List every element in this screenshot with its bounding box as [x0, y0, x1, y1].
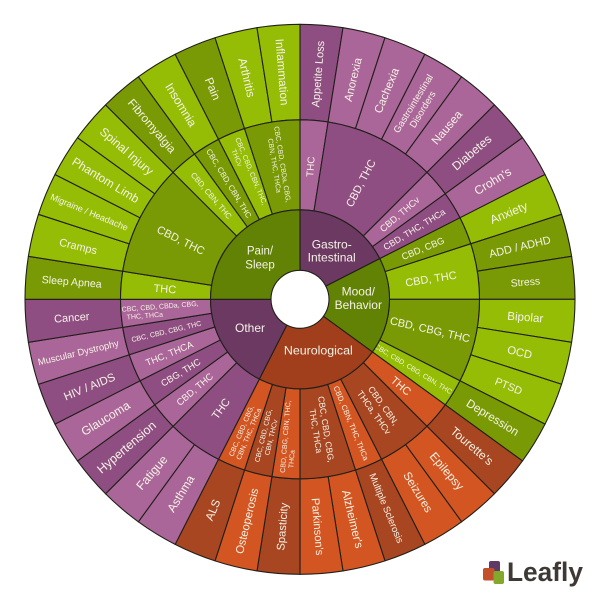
cell: CBD, CBN, THC	[173, 153, 257, 237]
cell: Gastrointestinal Disorders: Disorders	[408, 89, 439, 130]
cell: HIV / AIDS: HIV / AIDS	[62, 371, 118, 403]
cell: CBD, CBN, THC: CBD, CBN, THC	[189, 171, 234, 221]
category: Pain/Sleep	[210, 210, 300, 299]
cell: CBC, CBD, CBN, THC: CBC, CBD, CBN, THC	[204, 147, 253, 220]
cell: CBC, CBD, CBG, CBN, THCv	[244, 382, 286, 477]
cell: Insomnia	[138, 52, 231, 156]
cell: CBC, CBD, CBG, CBN, THCv: CBN, THCv	[264, 419, 280, 456]
cell: Epilepsy	[395, 425, 494, 524]
cell: CBC, CBD, CBN, THC, THCv	[219, 127, 285, 221]
cell: CBC, CBD, CBG, THC, THCa: CBC, CBD, CBG,	[316, 396, 336, 463]
cell: Other THC	[169, 350, 261, 459]
cell: Parkinson's: Parkinson's	[309, 498, 325, 556]
cell: CBC, CBD, CBG, CBN, THC: CBC, CBD, CBG, CBN, THC	[373, 343, 453, 396]
cell: Crohn's: Crohn's	[472, 165, 514, 198]
cell: Cachexia: Cachexia	[373, 66, 402, 115]
category: Neurological: Neurological	[284, 343, 353, 357]
cell: CBD, CBG	[379, 218, 473, 284]
cell: CBD, CBN, THC, THCa	[315, 378, 381, 472]
cell: CBC, CBD, CBG, CBN, THCv: CBC, CBD, CBG,	[254, 408, 274, 463]
cell: Alzheimer's: Alzheimer's	[339, 489, 366, 550]
cell: Arthritis: Arthritis	[235, 57, 258, 99]
cell: Spasticity	[257, 477, 300, 574]
cell: Mood CBD, THC: CBD, THC	[405, 270, 458, 290]
cell: Spinal Injury	[78, 103, 182, 195]
cell: Asthma: Asthma	[164, 472, 198, 515]
cell: Other THC: THC	[210, 396, 233, 422]
cell: Depression	[438, 380, 545, 462]
core ring: categories	[188, 210, 416, 423]
cell: Asthma	[137, 438, 220, 544]
cell: Osteoperosis	[214, 468, 272, 571]
cell: CBG, THC: CBG, THC	[159, 356, 203, 389]
cell: Bipolar	[477, 299, 575, 342]
cell: Stress: Stress	[510, 276, 541, 290]
cell: CBC, CBD, CBDa, CBG, THC, THCa: CBC, CBD, CBDa, CBG,	[122, 301, 199, 314]
category: Mood/Behavior: Mood/	[342, 284, 376, 298]
cell: THC, THCA	[127, 314, 221, 381]
cell: Pain THC: THC	[153, 283, 177, 297]
cell: Appetite Loss	[300, 24, 343, 122]
cell: Muscular Dystrophy	[25, 313, 131, 384]
cell: CBC, CBD, CBDa, CBG, THC, THCa	[118, 285, 213, 327]
cell: CBC, CBD, CBDa, CBG, CBN, THC, THCa: CBN, THC, THCa	[266, 138, 282, 194]
cell: CBC, CBD, CBG, THC: CBC, CBD, CBG, THC	[131, 320, 202, 344]
cell: Inflammation	[257, 21, 315, 124]
cell: Neuro THC	[355, 351, 445, 428]
cell: CBC, CBD, CBG, CBN, THC, THCa: CBN, THC, THCa	[236, 407, 263, 461]
cell: Pain	[175, 35, 258, 141]
cell: Phantom Limb: Phantom Limb	[70, 154, 142, 206]
cell: CBC, CBD, CBG, CBN, THC, THCa: CBC, CBD, CBG,	[228, 405, 256, 458]
cell: CBD, CBN, THCa, THCv	[321, 359, 427, 465]
cell: Anxiety	[458, 174, 565, 257]
cell: Sleep Apnea: Sleep Apnea	[41, 274, 102, 291]
cell: Seizures	[369, 443, 462, 547]
cell: Cramps	[28, 214, 132, 272]
icon: logo squares	[483, 561, 504, 584]
cell: THC, THCA: THC, THCA	[144, 339, 196, 369]
cell: Other CBD, THC	[153, 342, 237, 426]
cell: Tourette's	[418, 404, 522, 496]
cell: HIV / AIDS	[35, 341, 142, 424]
cell: CBD, CBG: CBD, CBG	[400, 234, 446, 262]
cell: Anorexia	[328, 28, 386, 131]
cell: CBD, CBG, CBN, THC, THCa: THCa	[288, 450, 297, 469]
cell: GI CBD, THC: CBD, THC	[344, 158, 379, 209]
category: Mood/Behavior: Behavior	[335, 298, 382, 312]
cell: Fatigue	[104, 417, 196, 522]
category: Neurological	[252, 302, 372, 423]
category: Gastro-Intestinal: Intestinal	[308, 251, 356, 265]
cell: Epilepsy: Epilepsy	[427, 449, 467, 493]
cell: Mood CBD, THC	[381, 244, 488, 326]
middle ring: cannabinoids	[118, 111, 488, 487]
cell: CBD, CBN, THCa, THCv: CBD, CBN,	[366, 384, 401, 427]
cell: Pain CBD, THC	[123, 167, 245, 288]
cell: Insomnia: Insomnia	[162, 80, 200, 130]
category: Gastro-Intestinal: Gastro-	[312, 237, 352, 251]
cell: Sleep Apnea	[25, 256, 123, 299]
cell: Depression: Depression	[464, 397, 521, 439]
cell: Fatigue: Fatigue	[133, 453, 171, 493]
cell: Migraine / Headache: Migraine / Headache	[49, 192, 130, 233]
cell: Pain: Pain	[202, 76, 223, 102]
cell: Multiple Sclerosis	[342, 457, 425, 564]
cell: Tourette's: Tourette's	[448, 424, 496, 468]
cell: Gastrointestinal Disorders: Gastrointestinal	[392, 73, 436, 135]
cell: OCD	[468, 327, 572, 385]
cell: Other CBD, THC: CBD, THC	[175, 371, 216, 409]
cell: Multiple Sclerosis: Multiple Sclerosis	[366, 472, 405, 545]
cell: ADD / ADHD	[469, 214, 575, 285]
cell: CBC, CBD, CBN, THC, THCv: THCv	[229, 148, 243, 168]
cell: Inflammation: Inflammation	[273, 38, 291, 106]
cell: Hypertension: Hypertension	[94, 418, 159, 476]
cell: CBD, THCv	[363, 172, 447, 257]
cell: Fibromyalgia: Fibromyalgia	[125, 97, 179, 156]
cell: Cancer	[22, 285, 125, 342]
cell: Bipolar: Bipolar	[507, 310, 544, 325]
cell: CBD, CBG, THC: CBD, CBG, THC	[389, 315, 471, 345]
cell: CBC, CBD, CBDa, CBG, CBN, THC, THCa: CBC, CBD, CBDa, CBG,	[272, 126, 291, 203]
cell: Cancer: Cancer	[54, 311, 90, 326]
cell: CBG, THC	[138, 329, 228, 405]
category: Pain/Sleep: Sleep	[245, 260, 275, 272]
cell: Gastrointestinal Disorders	[380, 54, 463, 161]
cell: Appetite Loss: Appetite Loss	[310, 40, 327, 108]
cell: CBC, CBD, CBG, THC	[121, 300, 216, 355]
cell: ALS	[174, 455, 245, 561]
cell: CBC, CBD, CBG, CBN, THC, THCa	[218, 375, 273, 470]
cell: Fibromyalgia	[106, 74, 205, 174]
cell: Stress	[475, 256, 578, 314]
cell: PTSD: PTSD	[493, 376, 524, 398]
cell: Pain THC	[120, 271, 212, 299]
cell: CBD, THC, THCa	[372, 194, 462, 270]
cell: Nausea	[404, 77, 496, 181]
wordmark: Leafly	[507, 557, 583, 587]
category: Other	[188, 275, 294, 379]
cell: CBC, CBD, CBG, CBN, THC	[366, 339, 460, 406]
cell: CBC, CBD, CBDa, CBG, CBN, THC, THCa	[245, 111, 326, 218]
cell: Phantom Limb	[55, 136, 162, 219]
category: Other: Other	[235, 321, 265, 335]
cell: Osteoperosis: Osteoperosis	[234, 487, 261, 555]
cell: CBC, CBD, CBN, THC	[194, 138, 271, 228]
cell: Arthritis	[215, 24, 286, 131]
cell: Nausea: Nausea	[429, 108, 465, 147]
cell: Neuro THC: THC	[388, 375, 413, 398]
cell: Spasticity: Spasticity	[275, 502, 291, 551]
cell: Diabetes: Diabetes	[449, 132, 494, 173]
cell: CBD, CBN, THCa, THCv: THCa, THCv	[355, 389, 393, 437]
cell: Muscular Dystrophy: Muscular Dystrophy	[37, 337, 120, 367]
cell: Glaucoma: Glaucoma	[79, 398, 133, 439]
cell: CBD, THC, THCa: CBD, THC, THCa	[382, 207, 447, 252]
cell: CBD, CBG, CBN, THC, THCa: CBD, CBG, CBN, THC,	[280, 400, 293, 473]
cell: Glaucoma	[52, 369, 157, 461]
cell: Anorexia: Anorexia	[343, 56, 365, 103]
cell: ADD / ADHD: ADD / ADHD	[488, 234, 552, 261]
cell: Alzheimer's	[314, 468, 385, 574]
cell: ALS: ALS	[204, 498, 223, 523]
cell: Pain CBD, THC: CBD, THC	[155, 224, 206, 258]
cell: CBD, CBG, CBN, THC, THCa	[272, 388, 300, 479]
cell: CBD, CBG, THC	[380, 299, 480, 381]
cell: CBC, CBD, CBN, THC, THCv: CBC, CBD, CBN, THC,	[233, 137, 267, 206]
cell: Crohn's	[443, 138, 548, 230]
cell: CBC, CBD, CBDa, CBG, THC, THCa: THC, THCa	[126, 312, 163, 321]
cell: Migraine / Headache	[38, 173, 145, 245]
category: Pain/Sleep: Pain/	[247, 246, 274, 258]
cell: GI CBD, THC	[311, 122, 432, 244]
cell: GI THC	[300, 120, 328, 211]
cell: GI THC: THC	[305, 156, 318, 177]
cell: Diabetes	[425, 105, 525, 204]
cell: Cachexia	[355, 38, 426, 144]
cell: Hypertension	[75, 394, 175, 494]
cell: CBC, CBD, CBG, THC, THCa	[274, 380, 355, 487]
cell: CBD, THCv: CBD, THCv	[377, 194, 422, 234]
cell: Anxiety: Anxiety	[488, 199, 530, 227]
cell: CBC, CBD, CBG, THC, THCa: THC, THCa	[307, 408, 324, 454]
cell: PTSD	[455, 354, 562, 425]
cell: Seizures: Seizures	[400, 470, 435, 515]
logo: Leafly	[483, 557, 583, 587]
cell: Spinal Injury: Spinal Injury	[97, 124, 156, 178]
cell: Cramps: Cramps	[58, 237, 99, 257]
category: Gastro-Intestinal	[300, 210, 380, 286]
category: Mood/Behavior	[312, 259, 416, 364]
cell: Parkinson's	[285, 474, 343, 578]
cell: OCD: OCD	[506, 344, 533, 362]
cell: CBD, CBN, THC, THCa: CBD, CBN, THC, THCa	[332, 385, 371, 463]
